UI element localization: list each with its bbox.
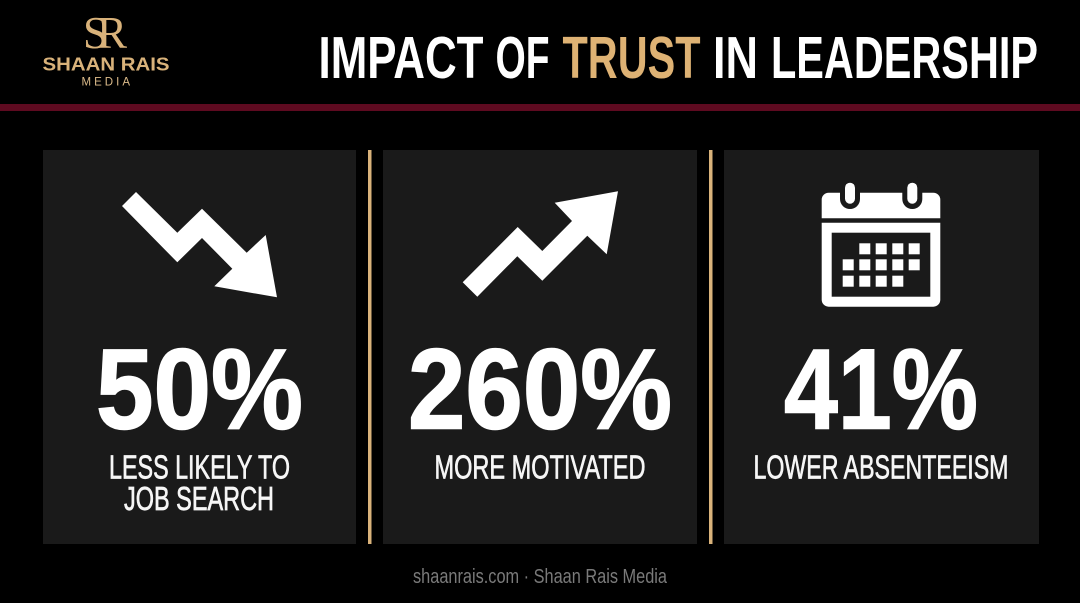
label: less likely to job search: JOB SEARCH (124, 480, 274, 517)
title: IN (713, 25, 758, 91)
panel: 50% less likely to job search (43, 150, 356, 544)
label: more motivated: MORE MOTIVATED (434, 448, 646, 486)
stat: 50%: 50% (96, 326, 303, 454)
title (318, 25, 1038, 91)
logo: Shaan Rais Media (42, 8, 170, 89)
panel: 41% lower absenteeism (724, 150, 1039, 544)
logo: Shaan Rais Media: MEDIA (82, 77, 130, 89)
label: less likely to job search (109, 448, 290, 517)
header rule (0, 104, 1080, 111)
stat: 41%: 41% (784, 326, 978, 454)
title: TRUST (562, 25, 700, 91)
footer: shaanrais.com · Shaan Rais Media (413, 566, 668, 588)
logo: Shaan Rais Media: R (97, 8, 127, 58)
icon: trending down arrow (122, 192, 277, 297)
icon: trending up arrow (463, 191, 618, 297)
logo: Shaan Rais Media: S (83, 8, 108, 58)
title: OF (496, 25, 550, 91)
logo: Shaan Rais Media: SHAAN RAIS (42, 54, 170, 74)
panel: 260% more motivated (383, 150, 697, 544)
title: IMPACT (318, 25, 484, 91)
icon: calendar (822, 176, 940, 307)
label: less likely to job search: LESS LIKELY TO (109, 448, 290, 486)
stat: 260%: 260% (408, 326, 672, 454)
divider (709, 150, 712, 544)
divider (368, 150, 372, 544)
